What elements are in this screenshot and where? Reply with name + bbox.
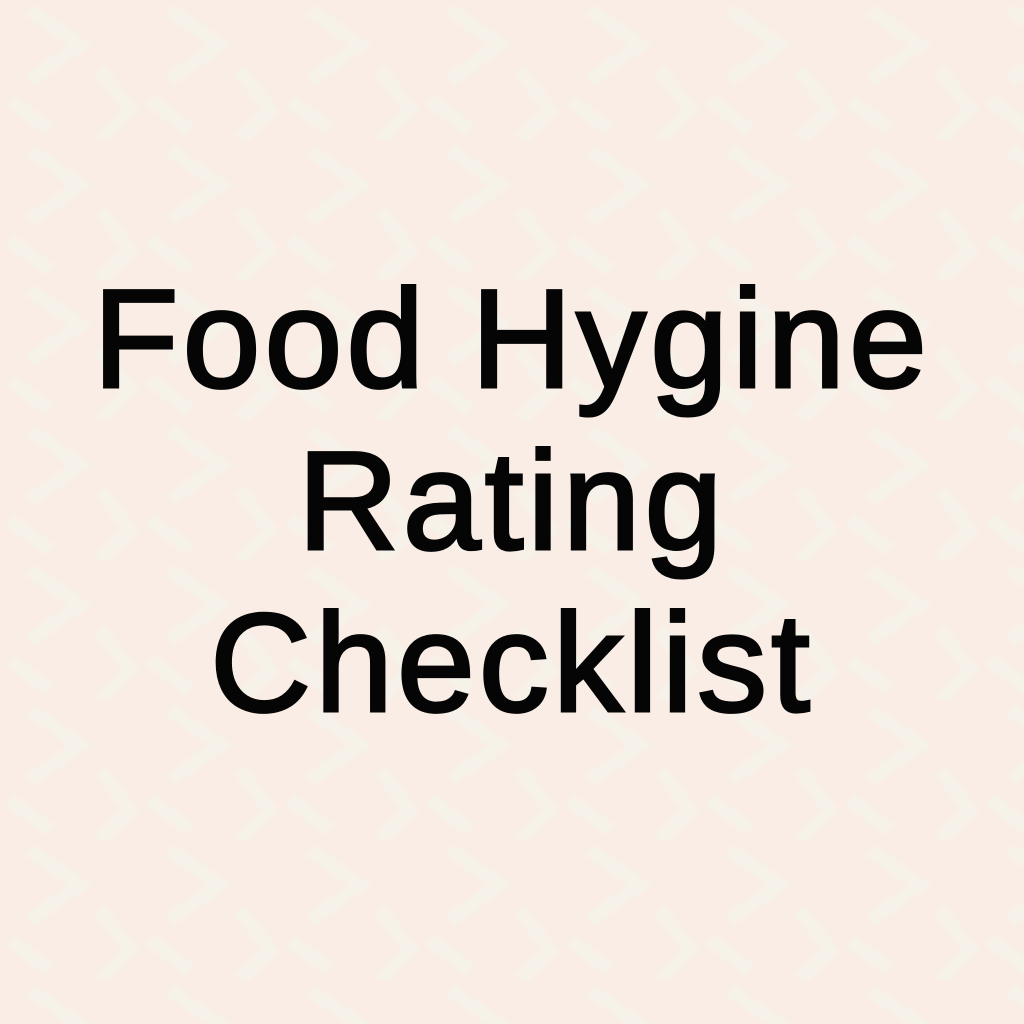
title: Checklist: [210, 584, 814, 741]
title: [93, 260, 931, 741]
title: Food Hygine: [93, 260, 931, 417]
title: Rating: [298, 422, 726, 579]
